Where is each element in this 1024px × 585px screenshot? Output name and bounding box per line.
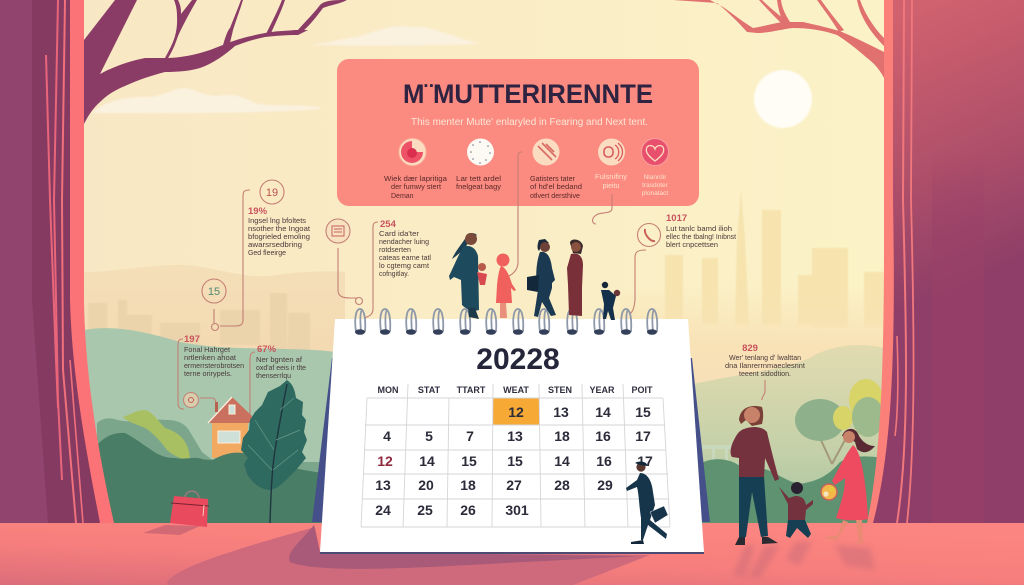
family shadows — [733, 542, 875, 578]
calendar dates: 4 — [383, 428, 391, 444]
weekday headers: MON — [378, 385, 398, 395]
right hill and valley — [690, 345, 884, 523]
callout: 197 text: Fonal Hahrget — [184, 345, 231, 354]
calendar dates: 301 — [505, 502, 529, 518]
callout: 254 text: nendacher luing — [379, 237, 429, 246]
icon: target dial — [399, 138, 426, 166]
caption 1 — [384, 176, 447, 200]
right curtain — [867, 0, 1024, 523]
figure: woman in maroon — [567, 240, 583, 316]
callout: 197 text: ermerrsterobrotsen — [184, 361, 244, 370]
caption 4: Fulsnifiny — [595, 174, 628, 181]
caption 4: pieitu — [603, 183, 619, 190]
calendar dates: 12 — [377, 453, 393, 469]
callout: 19 circle — [260, 180, 284, 204]
title: M¨MUTTERIRENNTE — [403, 79, 653, 109]
calendar dates: 7 — [466, 428, 474, 444]
calendar dates: 14 — [595, 404, 611, 420]
calendar grid — [361, 384, 670, 527]
callout: 254 text: cofngitlay. — [379, 269, 409, 278]
calendar dates: 29 — [597, 477, 613, 493]
callout: 19% text: 19% — [248, 206, 268, 217]
caption 2 — [456, 176, 502, 191]
callout: 254 text: cateas earne tatl — [379, 253, 431, 262]
calendar — [312, 309, 710, 554]
callout: 829 text: 829 — [742, 343, 758, 354]
figures standing on calendar — [449, 233, 620, 320]
calendar dates: 17 — [635, 428, 651, 444]
weekday headers: STAT — [418, 385, 441, 395]
caption 1: der fumwy stert — [391, 184, 441, 191]
caption 5: Nlanrdir — [644, 174, 667, 181]
callout: 1017 text: blert cnpcettsen — [666, 240, 718, 249]
callout: 19% text — [248, 206, 311, 257]
calendar year: 20228 — [476, 343, 560, 376]
caption 2: fnelgeat bagy — [456, 184, 502, 191]
callout: 15 circle: 15 — [208, 286, 220, 298]
calendar dates: 15 — [507, 453, 523, 469]
left tree branches — [84, 0, 347, 124]
calendar dates: 5 — [425, 428, 433, 444]
weekday headers: STEN — [548, 385, 572, 395]
calendar dates: 15 — [635, 404, 651, 420]
callout: 1017 text — [666, 213, 737, 249]
callout: 1017 text: Lut tanlc bamd ilioh — [666, 224, 732, 233]
figure: businesswoman — [527, 239, 556, 317]
weekday headers: TTART — [457, 385, 486, 395]
callout: 254 text — [379, 219, 431, 278]
distant skyline right — [665, 190, 884, 328]
spiral rings — [355, 309, 657, 335]
floor — [0, 523, 1024, 585]
callout: 19% text: bfogrieled emoling — [248, 232, 310, 241]
caption 1: Wiek dær lapritiga — [384, 176, 447, 183]
callout: 19% text: awarsrsedbring — [248, 240, 302, 249]
caption 4 — [595, 174, 628, 190]
caption 3: otlvert dersthive — [530, 193, 580, 200]
calendar dates: 17 — [637, 453, 653, 469]
haze over right city — [620, 285, 884, 385]
calendar dates: 16 — [596, 453, 612, 469]
sun — [754, 70, 812, 128]
figure: children pair — [601, 282, 620, 320]
calendar dates: 20 — [418, 477, 434, 493]
calendar dates: 14 — [554, 453, 570, 469]
caption 3 — [530, 176, 582, 200]
caption 5: plonatact — [642, 190, 668, 197]
weekday headers — [378, 385, 653, 395]
calendar dates: 13 — [375, 477, 391, 493]
callout: small house icon — [184, 392, 198, 408]
icon: tools — [532, 138, 560, 166]
callout: 254 text: rotdserten — [379, 245, 411, 254]
callout: 1017 text: ellec the tbalng! Inibnst — [666, 232, 737, 241]
icon: sound — [598, 138, 625, 166]
caption 3: Gatisters tater — [530, 176, 576, 183]
calendar dates: 26 — [460, 502, 476, 518]
calendar dates: 14 — [419, 453, 435, 469]
figure: father — [731, 406, 779, 545]
forest left — [97, 410, 330, 523]
calendar dates: 27 — [506, 477, 522, 493]
house — [208, 397, 252, 475]
calendar back sheet — [312, 358, 710, 522]
callout: 67% text: oxd'af eeis ir tlte — [256, 363, 306, 372]
calendar dates — [375, 404, 653, 518]
calendar page — [320, 319, 704, 552]
callout: 67% text: 67% — [257, 344, 277, 355]
callout: 197 text: terne orirypels. — [184, 369, 232, 378]
callout: 67% text: thenserrlqu — [256, 371, 291, 380]
left green hill — [84, 328, 335, 523]
callout: phone icon — [638, 224, 660, 246]
header panel — [337, 59, 699, 206]
right trees and bridge — [702, 379, 884, 523]
connector lines — [178, 152, 765, 415]
caption 1: Deman — [391, 193, 414, 200]
tree with large leaf — [241, 380, 307, 523]
callout: 829 text: Wer' tenlang d' lwalttan — [729, 353, 801, 362]
calendar dates: 15 — [461, 453, 477, 469]
callout: 19 circle: 19 — [266, 187, 278, 199]
caption 3: of hd'el bedand — [530, 184, 582, 191]
subtitle: This menter Mutte' enlaryled in Fearing and Next tent. — [411, 117, 648, 128]
callout: 197 text — [184, 334, 244, 378]
callout: 829 text — [725, 343, 806, 378]
calendar dates: 18 — [554, 428, 570, 444]
figure: woman with baby — [449, 233, 487, 319]
callout: document icon — [326, 219, 350, 243]
calendar dates: 13 — [507, 428, 523, 444]
callout: 67% text — [256, 344, 306, 380]
callout: 19% text: Ged fleeirge — [248, 248, 286, 257]
right tree branches — [673, 0, 884, 78]
clouds — [92, 26, 480, 113]
left curtain — [0, 0, 114, 523]
dark calendar shadow — [289, 525, 640, 569]
calendar dates: 18 — [460, 477, 476, 493]
caption 5: trasdoter — [642, 182, 669, 189]
weekday headers: POIT — [631, 385, 653, 395]
family on right — [731, 406, 875, 578]
weekday headers: YEAR — [589, 385, 615, 395]
figure: woman walking with briefcase — [626, 462, 668, 544]
calendar dates: 24 — [375, 502, 391, 518]
callout: 829 text: dna Ilanrerrnmaeclesnnt — [725, 361, 806, 370]
callout: 197 text: nrtlenken ahoat — [184, 353, 237, 362]
callout: 254 text: Card ida'ter — [379, 229, 420, 238]
callout: 829 text: teeent sidodtion. — [739, 369, 791, 378]
skyline left — [88, 293, 310, 353]
distant hills left — [84, 265, 345, 360]
highlighted date cell — [493, 398, 539, 425]
callout: 67% text: Ner bgnten af — [256, 355, 303, 364]
figure: toddler — [779, 482, 813, 538]
figure: mother in pink dress — [822, 429, 875, 543]
calendar dates: 28 — [554, 477, 570, 493]
handbag on floor — [143, 491, 209, 535]
basket of flowers — [821, 484, 837, 500]
caption 5 — [642, 174, 669, 197]
figure: girl in pink — [496, 254, 516, 318]
calendar dates: 13 — [553, 404, 569, 420]
caption 2: Lar tett ardel — [456, 176, 501, 183]
icon: heart — [642, 138, 668, 166]
callout: 197 text: 197 — [184, 334, 200, 345]
calendar dates: 12 — [508, 404, 524, 420]
floor shadow of calendar — [167, 527, 650, 585]
callout: 254 text: lo cgtemg camt — [379, 261, 430, 270]
callout: 254 text: 254 — [380, 219, 397, 230]
weekday headers: WEAT — [503, 385, 529, 395]
icon: clock — [467, 138, 494, 166]
callout: 19% text: Ingsel lng bfoltets — [248, 216, 306, 225]
calendar dates: 16 — [595, 428, 611, 444]
callout: 15 circle — [202, 279, 226, 303]
callout: 1017 text: 1017 — [666, 213, 687, 224]
callout: 19% text: nsother the Ingoat — [248, 224, 311, 233]
calendar dates: 25 — [417, 502, 433, 518]
